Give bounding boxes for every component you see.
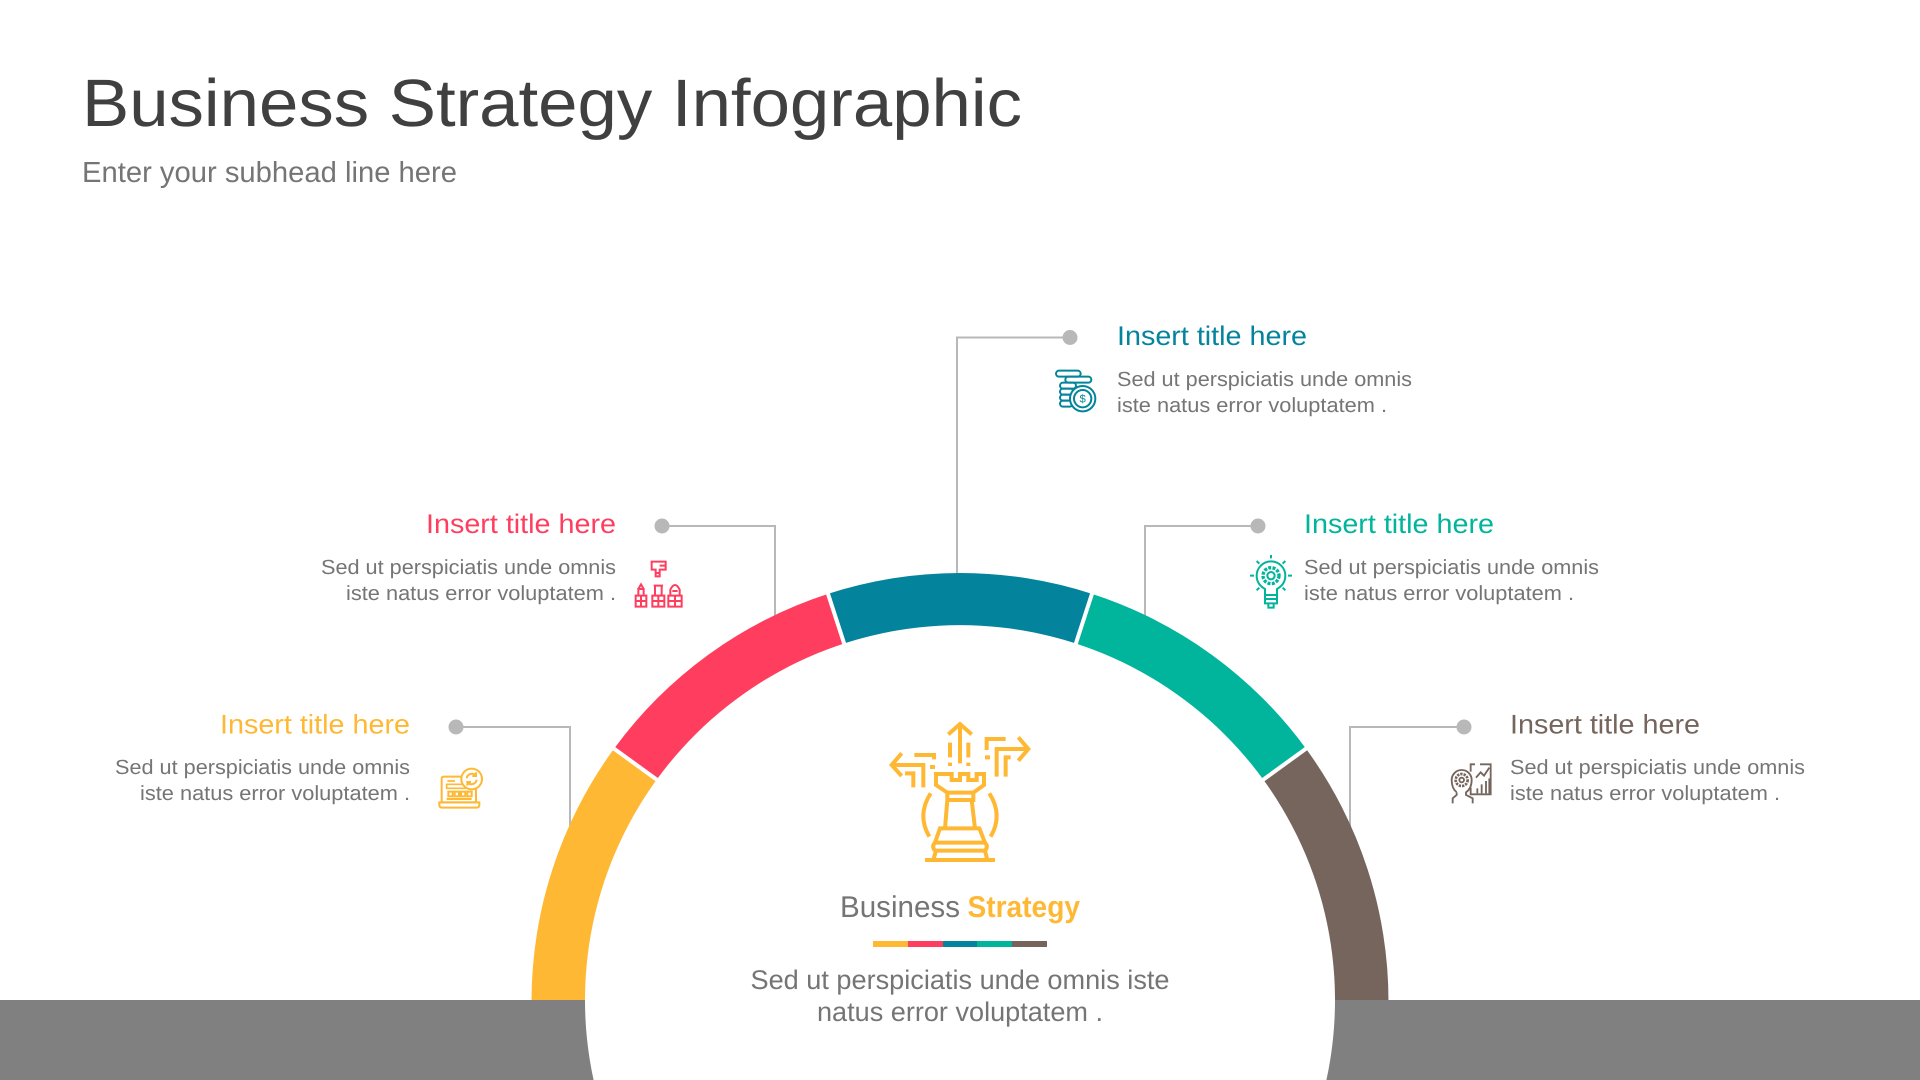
blue text: iste natus error voluptatem . xyxy=(1117,394,1387,417)
icon: laptop refresh xyxy=(439,769,482,808)
green title: Insert title here xyxy=(1304,509,1494,539)
icon: lightbulb gear xyxy=(1250,555,1292,608)
color bar xyxy=(873,941,1047,947)
green text: iste natus error voluptatem . xyxy=(1304,582,1574,605)
yellow text: iste natus error voluptatem . xyxy=(140,782,410,805)
center white circle xyxy=(585,625,1335,1080)
yellow text: Sed ut perspiciatis unde omnis xyxy=(115,756,410,779)
green text: Sed ut perspiciatis unde omnis xyxy=(1304,556,1599,579)
center heading: Strategy xyxy=(968,891,1080,924)
connector: red xyxy=(654,518,775,620)
yellow text xyxy=(115,756,410,805)
connector: yellow xyxy=(448,720,570,830)
bottom gray band xyxy=(0,1000,1920,1080)
ring segment: brown xyxy=(960,750,1388,1002)
blue text xyxy=(1117,368,1412,417)
icon: coins xyxy=(1056,371,1095,411)
blue title: Insert title here xyxy=(1117,321,1307,351)
yellow title: Insert title here xyxy=(220,710,410,740)
brown text: iste natus error voluptatem . xyxy=(1510,782,1780,805)
ring segment: red xyxy=(613,594,960,1002)
callout: green xyxy=(1250,509,1599,608)
center description: Sed ut perspiciatis unde omnis iste xyxy=(750,965,1170,995)
connector: green xyxy=(1145,518,1266,620)
ring segment: yellow xyxy=(532,750,960,1002)
green text xyxy=(1304,556,1599,605)
title: Business Strategy Infographic xyxy=(82,66,1022,141)
brown text: Sed ut perspiciatis unde omnis xyxy=(1510,756,1805,779)
red text xyxy=(321,556,616,605)
brown title: Insert title here xyxy=(1510,710,1700,740)
center heading: Business xyxy=(840,891,960,924)
callout: red xyxy=(321,509,682,607)
red text: Sed ut perspiciatis unde omnis xyxy=(321,556,616,579)
subtitle: Enter your subhead line here xyxy=(82,157,457,189)
icon: coins: $ xyxy=(1080,393,1086,405)
red title: Insert title here xyxy=(426,509,616,539)
callout: yellow xyxy=(115,710,482,808)
center description xyxy=(750,965,1170,1027)
ring segment: blue xyxy=(828,573,1092,1002)
red text: iste natus error voluptatem . xyxy=(346,582,616,605)
center heading xyxy=(840,891,1080,924)
callout: blue xyxy=(1056,321,1412,417)
semicircle ring xyxy=(532,573,1388,1002)
callout: brown xyxy=(1452,710,1805,805)
icon: chess rook with arrows xyxy=(892,724,1028,860)
connector: blue xyxy=(957,330,1078,590)
connector: brown xyxy=(1350,720,1472,830)
ring segment: green xyxy=(960,594,1307,1002)
icon: head with gear and chart xyxy=(1452,764,1491,803)
center description: natus error voluptatem . xyxy=(817,997,1103,1027)
brown text xyxy=(1510,756,1805,805)
icon: team xyxy=(636,562,682,607)
blue text: Sed ut perspiciatis unde omnis xyxy=(1117,368,1412,391)
